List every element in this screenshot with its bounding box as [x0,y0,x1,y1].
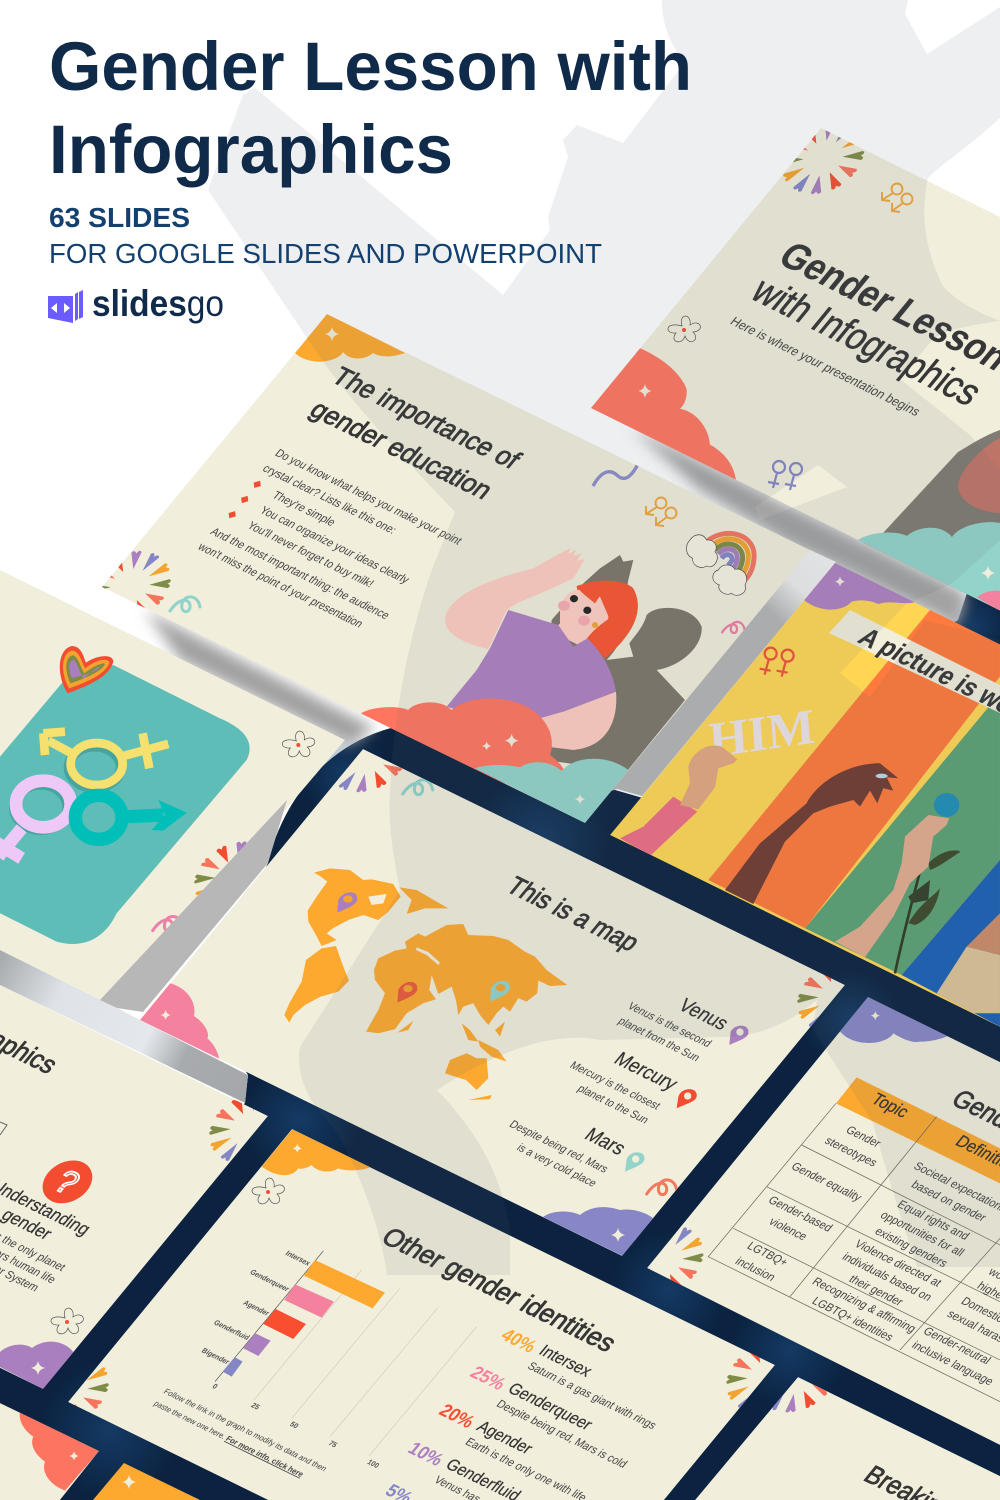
chart labels: Genderqueer [248,1268,292,1293]
rose [895,793,961,973]
header block [48,28,692,324]
item: Venus: Venus is the second [625,1000,714,1050]
logo wordmark: slidesgo [92,283,224,324]
icon: flower [252,1178,284,1204]
column: examples: Gender-neutral [920,1326,993,1367]
icon: rainbow heart [60,646,113,693]
icon: rainbow [686,533,754,595]
heading: Other gender identities [376,1223,622,1357]
icon: top burst [310,710,426,804]
cloud: blue corner [839,997,950,1043]
chart ticks: 50 [288,1420,301,1430]
column: topics: LGTBQ+ [744,1240,790,1269]
icon: male symbols [882,184,912,212]
heading line 1: The importance of [326,362,527,475]
title [49,28,692,188]
cheeks [558,601,570,611]
symbol: male [75,795,163,839]
map pin: purple [337,892,357,913]
africa and eurasia [366,924,567,1033]
body text: They're simple [269,490,338,529]
madagascar [397,1021,413,1033]
column: definitions: LGBTQ+ identities [809,1295,896,1344]
item: Mars: is a very cold place [514,1142,599,1190]
icon: right burst [710,1330,824,1424]
icon: left burst [11,1343,125,1437]
item: Mercury: Mercury is the closest [567,1060,663,1112]
teal cloud [475,759,628,823]
panel: picture slide [610,563,1000,1027]
chart ticks: 100 [365,1457,382,1470]
watermark silhouette [208,0,1000,1275]
face and neck [558,590,608,644]
new zealand [468,1095,492,1100]
panel: bottom orange corner [93,1463,200,1500]
bar chart [215,1251,477,1456]
icon: female symbols [768,461,802,490]
raised arm [445,548,585,649]
slide text [143,1187,701,1500]
panel: breaking slide [695,1330,1000,1500]
south america [284,946,349,1023]
panel: map slide [140,710,896,1256]
cloud: salmon corner [20,1412,99,1491]
table header [836,1077,1000,1183]
map gaps: seas and lakes [368,894,440,965]
icon: flower [51,1308,83,1334]
legend: Agender: Agender [473,1418,537,1458]
heading line 2: gender education [304,396,498,505]
symbol shadows [14,747,121,830]
logo [48,283,224,324]
cloud: blue corner [543,1207,653,1256]
icon: burst [740,1330,854,1424]
body text: You'll never forget to buy milk! [244,520,376,590]
light arm [835,815,949,957]
column: topics: inclusion [732,1256,778,1284]
legend: Genderqueer [457,1362,645,1471]
nail [876,774,888,778]
shadow silhouette [545,555,702,772]
column: topics: Gender-based [765,1195,835,1234]
column: definitions: based on gender [909,1179,988,1224]
bar: Intersex [304,1260,385,1308]
legend: Genderqueer: Genderqueer [504,1380,597,1434]
title: Gender Lesson with [49,28,692,105]
illustration: person with shadow [360,548,702,823]
eyes [570,595,578,602]
item: Mars [495,1094,631,1190]
bar: Genderfluid [243,1333,271,1356]
item: Mercury: planet to the Sun [575,1083,651,1126]
importance slide text [198,366,524,628]
chart caption: paste the new one here. For more info, click here [152,1399,306,1479]
icon: male symbols [646,498,676,526]
purple cloud [804,563,915,610]
dark arm [725,763,898,904]
pin: mercury [677,1089,697,1108]
legend: Intersex: 40% [497,1324,541,1356]
greenland [399,887,448,914]
salmon cloud [360,699,564,790]
icon: burst [783,130,864,194]
subtitle: slide count: 63 SLIDES [49,202,190,233]
column: topics [717,1116,901,1291]
bar: Bigender [223,1357,243,1377]
column: topics: stereotypes [822,1135,880,1169]
item: Venus [613,977,733,1064]
column: definitions: opportunities for all [877,1210,966,1259]
band: orange [708,610,1000,928]
body text: Do you know what helps you make your point [272,448,465,548]
column: definitions: individuals based on [839,1251,934,1304]
icon: question badge: ? [47,1163,88,1201]
navy backdrop behind slides [0,590,1000,1500]
icon: salmon squiggle [647,1180,677,1195]
australia [445,1053,488,1090]
column: definitions: Equal rights and [894,1199,971,1243]
sleeve arm [937,913,1000,1013]
header: Topic: Topic [867,1090,913,1122]
item: Mars: Mars [580,1124,630,1160]
outlined box fragment [0,1122,7,1135]
shadow under cover slide [632,428,967,628]
cloud: salmon corner [590,348,736,480]
chart ticks: 75 [327,1439,339,1449]
column: topics: Gender [843,1124,883,1150]
cloud: orange corner [295,314,405,362]
cloud: orange corner [262,1129,372,1175]
chart labels: Genderfluid [212,1318,252,1342]
cloud: pink corner [140,983,219,1060]
shadow under importance slide [145,610,375,745]
title strip [829,610,1000,713]
body text: crystal clear? Lists like this one: [260,463,399,537]
hair back [577,581,638,658]
subtitle: Here is where your presentation begins [727,314,923,419]
legend: Genderqueer: Despite being red, Mars is cold [494,1398,629,1471]
map slide text [354,872,757,1190]
bar: Genderqueer [284,1284,334,1318]
icon: pink squiggle [153,916,183,931]
column: definitions: their gender [846,1274,905,1309]
star on cloud [325,327,339,341]
icon: flower [282,731,315,757]
arrow head [152,800,187,831]
icon: pink squiggle [722,622,744,633]
shadow below symbols slide [0,950,248,1103]
band: blue [902,860,1000,1027]
panel: bottom-left slide [0,1403,99,1500]
hand holding letters [620,745,737,856]
icon: burst [606,1213,720,1307]
item: Venus: planet from the Sun [615,1015,702,1064]
subtitle: platforms: FOR GOOGLE SLIDES AND POWERPOINT [49,238,602,269]
icon: wavy line [593,464,638,486]
map pin: red [397,982,417,1003]
column: definitions: Recognizing & affirming [809,1276,918,1335]
icon: right burst [780,949,896,1043]
column: topics: violence [766,1216,809,1243]
legend: Intersex: Saturn is a gas giant with rings [525,1360,659,1432]
column: definitions: Violence directed at [852,1238,944,1290]
column: examples: inclusive language [909,1340,996,1388]
panel: other gender identities slide [11,1129,824,1500]
north america [308,868,401,946]
pin: mars [625,1152,644,1172]
legend: Genderqueer: 25% [466,1362,511,1394]
item: Venus: Venus [674,994,733,1035]
purple t-shirt [447,610,616,720]
heading: cover title line 2: with Infographics [742,268,991,413]
axis [215,1251,323,1382]
legend: Intersex: Intersex [535,1342,596,1381]
teal photo card [0,665,250,944]
grey band beside map slide [100,800,287,1012]
star on cloud [611,1228,625,1242]
band: green [805,693,1000,975]
logo icon [48,290,83,323]
body text: won't miss the point of your presentation [194,541,365,630]
chart ticks: 25 [249,1401,262,1411]
earring [592,622,598,628]
panel: cover slide [590,110,1000,620]
panel: importance of gender education slide [72,314,810,823]
icon: burst [177,830,293,924]
item: Mercury: Mercury [609,1048,683,1095]
chart ticks [210,1382,382,1470]
pin: venus [729,1026,748,1045]
column: topics: Gender equality [788,1161,864,1204]
symbol: yellow trans symbol [43,732,168,785]
lower arm [537,692,616,750]
title: Infographics [49,111,453,188]
illustration: shadow hill with teal clouds [858,430,1000,620]
legend: Genderfluid [395,1437,525,1500]
right column pins and decorations [625,1026,748,1195]
item: Mars: Despite being red, Mars [507,1119,611,1176]
icon: burst [192,1081,308,1175]
map pin: teal [490,981,510,1002]
legend: Intersex [488,1324,674,1432]
icon: question badge [32,1153,102,1210]
chart labels: Intersex [284,1249,313,1268]
icon: teal squiggle [170,597,200,612]
body text: And the most important thing: the audience [208,526,392,622]
icon: teal squiggle [403,780,433,795]
chart ticks: 0 [210,1382,220,1391]
grid lines [254,1270,477,1456]
legend: Agender: 20% [435,1400,479,1432]
panel: gender symbols slide [0,570,345,1008]
body text: You can organize your ideas clearly [257,505,412,586]
item: Mercury [556,1034,683,1126]
chart labels: Bigender [200,1346,232,1366]
panel: understanding gender slide [0,985,308,1389]
cloud: purple corner [0,1342,74,1389]
list bullets [228,480,261,518]
bar: Agender [263,1309,306,1339]
chart labels: Agender [241,1298,272,1318]
south east asia islands [462,1022,507,1062]
photo: colour bands with hands [620,563,1000,1027]
chart caption: Follow the link in the graph to modify its data and then [162,1387,329,1473]
cover text [730,244,1000,416]
icon: female symbols [760,648,794,677]
symbol: female [0,781,71,858]
body text [198,448,462,628]
legend: Agender [426,1400,604,1500]
map: world [284,868,567,1100]
table grid [708,1103,1000,1402]
column: examples [909,1246,1000,1388]
star on cloud [31,1361,45,1375]
legend: Genderfluid: 10% [404,1437,448,1470]
column: definitions: existing genders [872,1226,950,1270]
column: definitions [798,1158,1000,1349]
heading: This is a map [501,872,645,957]
panel: gender table slide [606,997,1000,1445]
fringe [576,584,610,620]
icon: flower [668,316,700,342]
chart labels [188,1242,313,1366]
gap band between slides [585,550,836,800]
star on cloud [122,1475,136,1489]
HIM letters: HIM [707,698,816,768]
icon: burst [102,550,171,608]
